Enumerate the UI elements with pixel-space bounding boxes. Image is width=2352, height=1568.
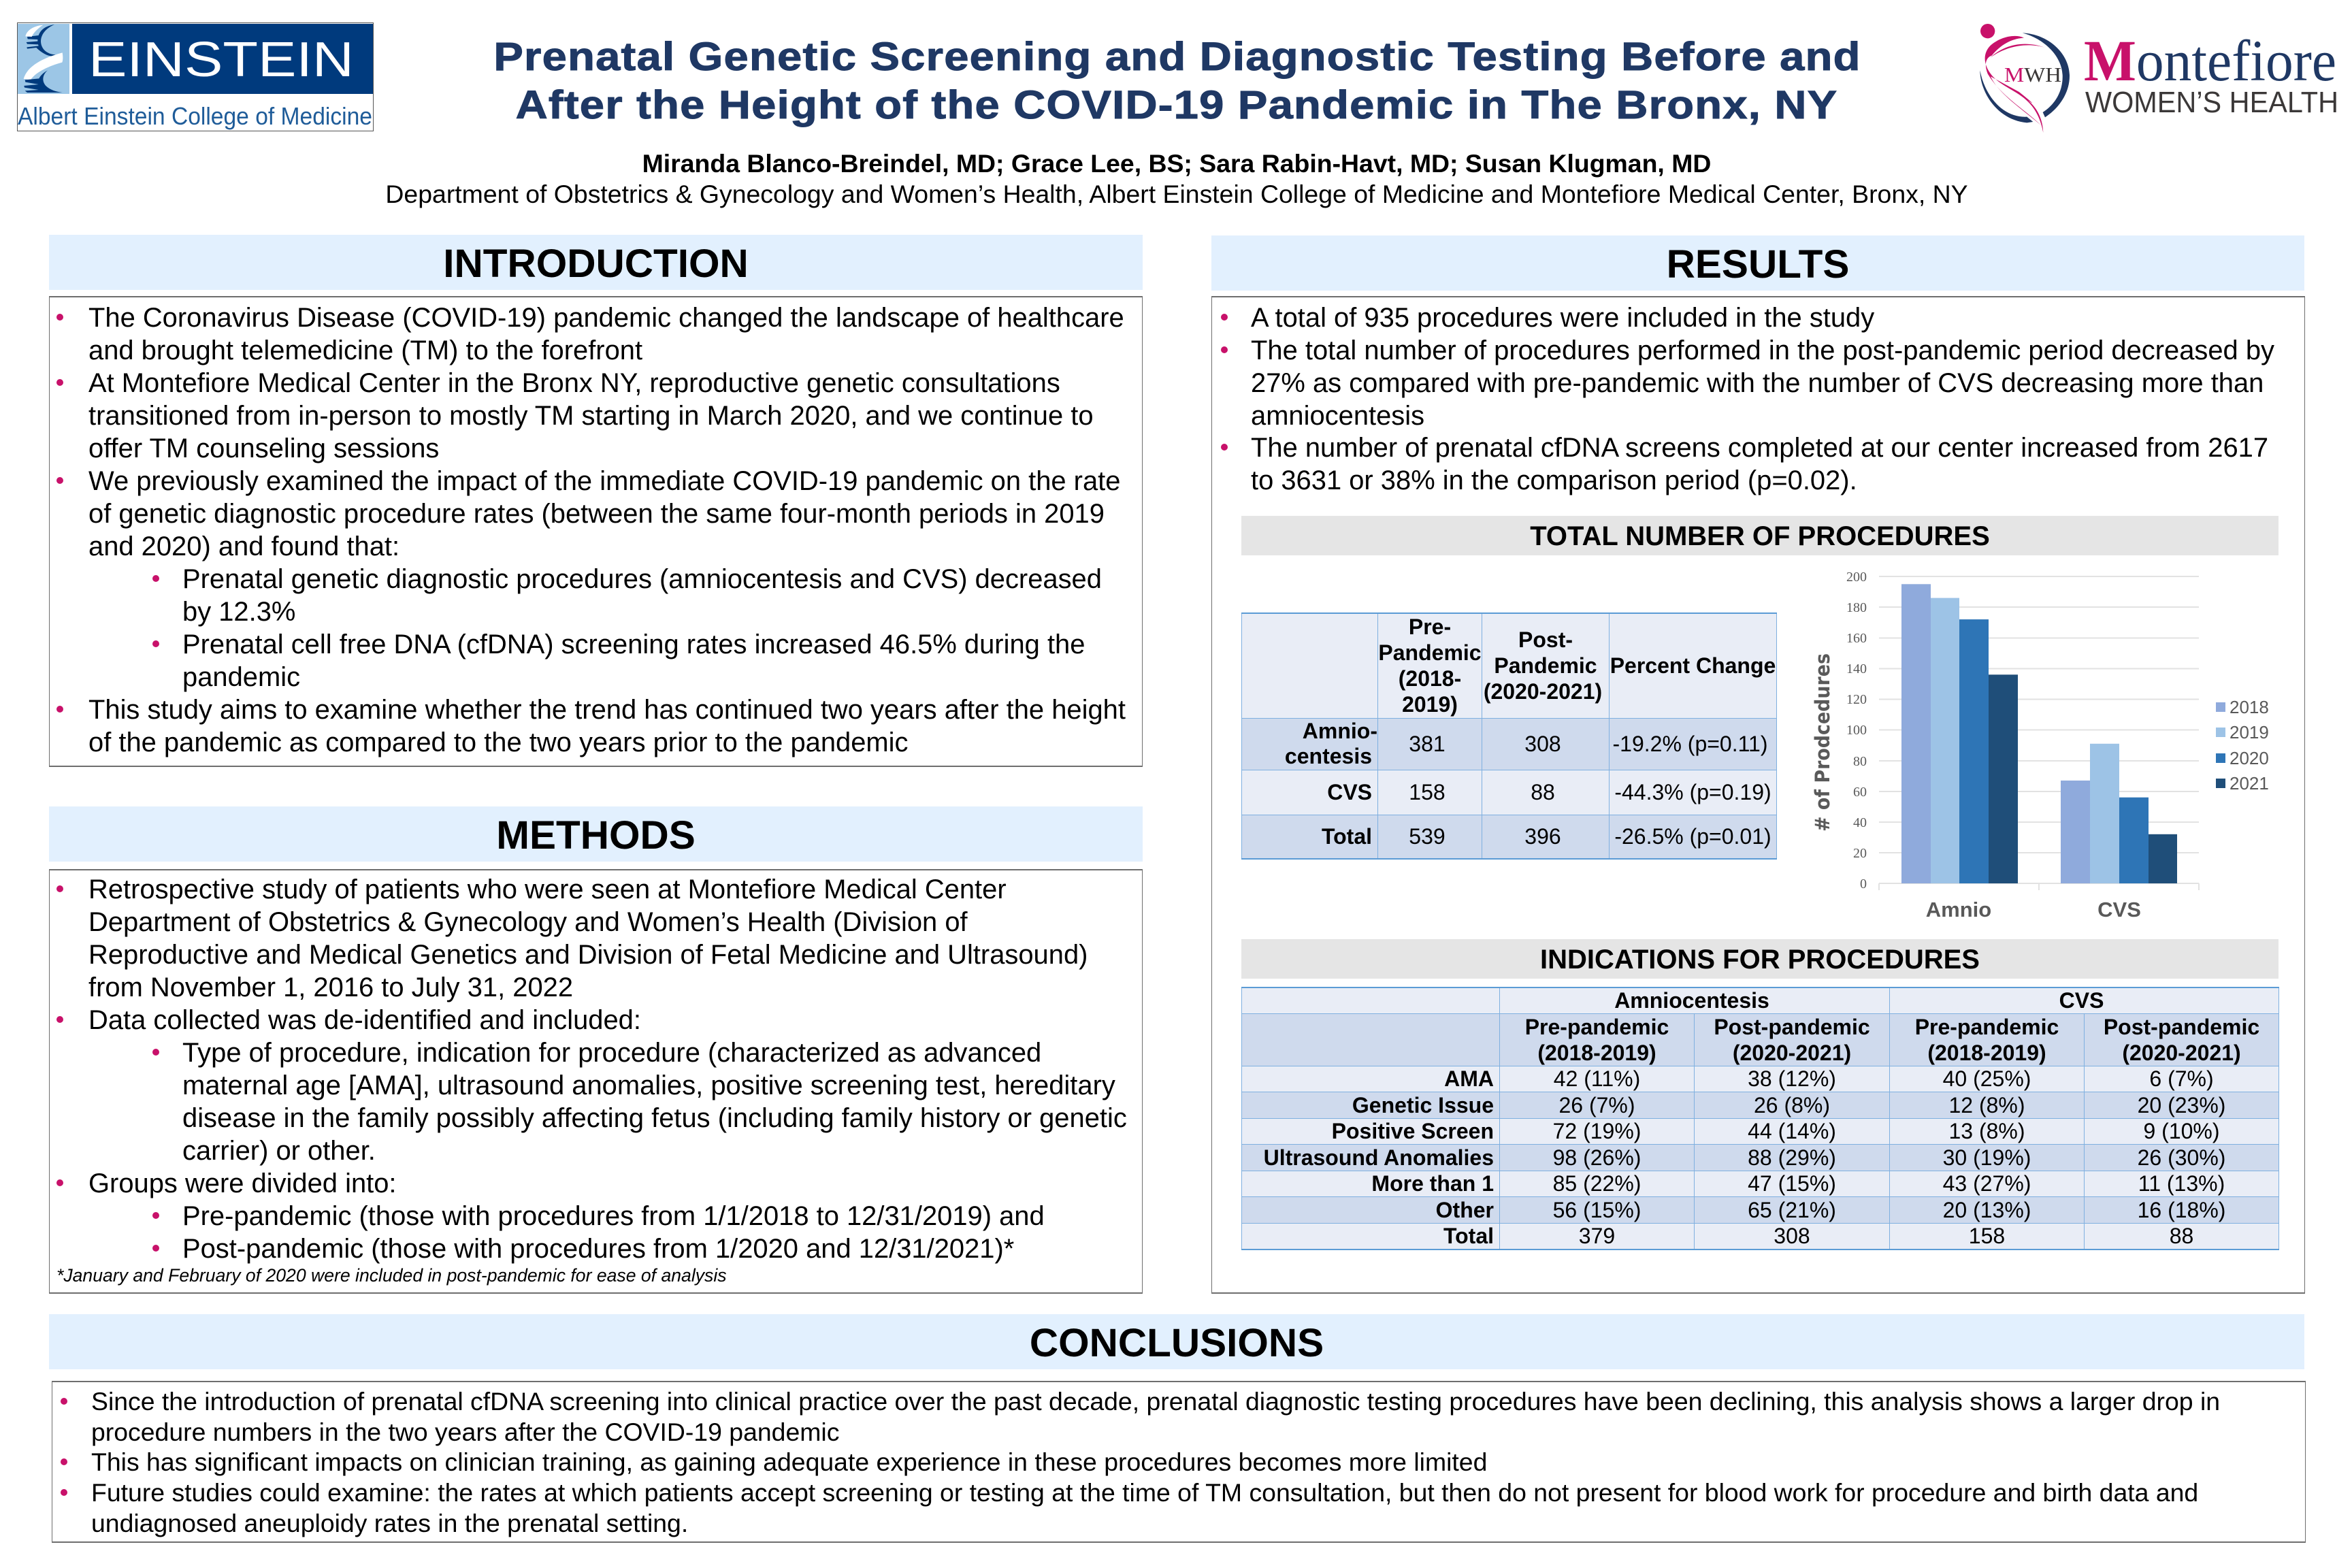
bullet: retrospective study: from November 1, 2016 to July 31, 2022 bbox=[88, 973, 573, 1002]
sub-bullet: procedure type: disease in the family possibly affecting fetus (including family history or genetic bbox=[182, 1103, 1127, 1133]
table: indications bbox=[1241, 987, 2279, 1250]
bullet: telemedicine context: The Coronavirus Disease (COVID-19) pandemic changed the landscape of healthcare bbox=[88, 303, 1124, 333]
bullet: Montefiore transition: At Montefiore Medical Center in the Bronx NY, reproductive genetic consultations bbox=[88, 368, 1060, 398]
table: total procedures: 2019) bbox=[1402, 692, 1458, 717]
bullet: telemedicine context: and brought telemedicine (TM) to the forefront bbox=[88, 336, 642, 365]
sub-bullet: cfDNA increased bbox=[152, 630, 1085, 692]
table: indications: (2020-2021) bbox=[1733, 1040, 1851, 1064]
y axis tick labels: 80 bbox=[1853, 754, 1867, 769]
table: total procedures: 396 bbox=[1524, 824, 1561, 849]
axis title: # of Prodcedures bbox=[1811, 653, 1834, 832]
bullet: previous study: We previously examined the impact of the immediate COVID-19 pandemic on the rate bbox=[88, 466, 1120, 496]
logo: Albert Einstein College of Medicine bbox=[17, 22, 374, 131]
bars: Amnio bbox=[1901, 584, 2018, 883]
panel: results bbox=[1211, 296, 2305, 1294]
subheading: total number of procedures: TOTAL NUMBER OF PROCEDURES bbox=[1530, 521, 1990, 551]
y axis tick labels: 200 bbox=[1846, 570, 1867, 585]
table: total procedures bbox=[1241, 612, 1777, 860]
category labels bbox=[1926, 898, 2141, 921]
table: total procedures: (2020-2021) bbox=[1484, 679, 1602, 704]
sub-bullet: procedures decreased: by 12.3% bbox=[182, 597, 295, 627]
subheading: indications for procedures bbox=[1241, 939, 2278, 979]
bullet: total procedures: A total of 935 procedures were included in the study bbox=[1251, 303, 1874, 333]
subheading: total number of procedures bbox=[1241, 516, 2278, 555]
title: Prenatal Genetic Screening and Diagnostic Testing Before and bbox=[493, 35, 1861, 79]
table: total procedures: Pandemic bbox=[1378, 640, 1482, 665]
sub-bullet: procedures decreased bbox=[152, 564, 1102, 627]
table: indications: 42 (11%) bbox=[1554, 1066, 1640, 1091]
bullet: study aim bbox=[56, 695, 1126, 757]
wordmark: Montefiore: Montefiore bbox=[2084, 28, 2336, 93]
y axis tick labels: 60 bbox=[1853, 785, 1867, 800]
title bbox=[493, 35, 1861, 127]
bullet: telemedicine context bbox=[56, 303, 1124, 365]
panel: introduction bbox=[49, 296, 1143, 767]
panel: methods bbox=[49, 869, 1143, 1294]
sub-bullet: procedure type: Type of procedure, indication for procedure (characterized as advanced bbox=[182, 1038, 1041, 1068]
y axis tick labels: 100 bbox=[1846, 723, 1867, 738]
y axis tick labels: 0 bbox=[1860, 877, 1867, 892]
bullet: declining procedures: procedure numbers in the two years after the COVID-19 pandemic bbox=[91, 1418, 839, 1446]
table: indications: 72 (19%) bbox=[1553, 1119, 1641, 1143]
table: total procedures: (2018- bbox=[1399, 666, 1461, 691]
table: total procedures: Amnio- bbox=[1303, 719, 1377, 743]
table: total procedures: 88 bbox=[1531, 780, 1555, 804]
sub-bullet: procedures decreased: Prenatal genetic diagnostic procedures (amniocentesis and CVS) decreased bbox=[182, 564, 1102, 594]
table: indications: Pre-pandemic bbox=[1525, 1014, 1669, 1039]
bullet: groups: Groups were divided into: bbox=[88, 1169, 397, 1198]
heading: methods bbox=[49, 806, 1143, 862]
table: total procedures: -26.5% (p=0.01) bbox=[1614, 824, 1771, 849]
table: indications: 43 (27%) bbox=[1943, 1171, 2031, 1196]
bullet: retrospective study bbox=[56, 875, 1088, 1002]
bullet: Montefiore transition: offer TM counseling sessions bbox=[88, 434, 439, 463]
table: indications: 12 (8%) bbox=[1948, 1093, 2025, 1117]
title: After the Height of the COVID-19 Pandemic in The Bronx, NY bbox=[516, 83, 1838, 127]
category labels: CVS bbox=[2097, 898, 2141, 921]
bullet: cfDNA screens bbox=[1221, 433, 2268, 495]
heading: introduction: INTRODUCTION bbox=[443, 242, 749, 286]
bullet: retrospective study: Department of Obstetrics & Gynecology and Women’s Health (Division of bbox=[88, 907, 968, 937]
bullet: clinician training: This has significant impacts on clinician training, as gaining adequate experience in these procedures becomes more limited bbox=[91, 1448, 1487, 1476]
logo: Montefiore Women's Health bbox=[1980, 24, 2338, 133]
table: indications: Pre-pandemic bbox=[1915, 1014, 2059, 1039]
table: indications: Amniocentesis bbox=[1614, 988, 1769, 1013]
bullet: decrease in procedures: 27% as compared with pre-pandemic with the number of CVS decreasing more than bbox=[1251, 368, 2264, 398]
table: indications: 16 (18%) bbox=[2138, 1198, 2225, 1222]
table: indications: 98 (26%) bbox=[1553, 1145, 1641, 1170]
table: total procedures: Percent Change bbox=[1610, 653, 1776, 678]
bullet: decrease in procedures: The total number of procedures performed in the post-pandemic period decreased by bbox=[1251, 336, 2274, 365]
sub-bullet: procedure type: carrier) or other. bbox=[182, 1136, 376, 1166]
table: total procedures: CVS bbox=[1327, 780, 1372, 804]
table: indications: Genetic Issue bbox=[1352, 1093, 1494, 1117]
y axis tick labels bbox=[1846, 570, 1867, 892]
bullet: cfDNA screens: The number of prenatal cfDNA screens completed at our center increased from 2617 bbox=[1251, 433, 2268, 463]
bullet: future studies bbox=[61, 1478, 2198, 1537]
table: indications: 26 (8%) bbox=[1754, 1093, 1830, 1117]
bullet: declining procedures: Since the introduction of prenatal cfDNA screening into clinical practice over the past decade, prenatal diagnostic testing procedures have been declining, this analysis shows a larger drop in bbox=[91, 1387, 2220, 1416]
table: indications: 88 (29%) bbox=[1748, 1145, 1836, 1170]
table: indications: 158 bbox=[1969, 1224, 2005, 1248]
table: total procedures: centesis bbox=[1285, 744, 1372, 768]
heading: conclusions bbox=[49, 1314, 2304, 1369]
heading: conclusions: CONCLUSIONS bbox=[1030, 1321, 1324, 1365]
table: indications: 38 (12%) bbox=[1748, 1066, 1836, 1091]
table: indications: Positive Screen bbox=[1332, 1119, 1494, 1143]
table: indications: 379 bbox=[1579, 1224, 1615, 1248]
table: total procedures: Pre- bbox=[1409, 615, 1451, 639]
bullet: future studies: undiagnosed aneuploidy rates in the prenatal setting. bbox=[91, 1509, 688, 1537]
table: indications: 9 (10%) bbox=[2143, 1119, 2220, 1143]
sub-bullet: procedure type: maternal age [AMA], ultrasound anomalies, positive screening test, hereditary bbox=[182, 1071, 1115, 1100]
table: total procedures: 539 bbox=[1409, 824, 1446, 849]
table: indications: CVS bbox=[2059, 988, 2104, 1013]
y axis tick labels: 120 bbox=[1846, 692, 1867, 707]
y axis tick labels: 160 bbox=[1846, 631, 1867, 646]
bullet: cfDNA screens: to 3631 or 38% in the comparison period (p=0.02). bbox=[1251, 466, 1857, 495]
table: indications: 47 (15%) bbox=[1748, 1171, 1836, 1196]
table: indications: 40 (25%) bbox=[1943, 1066, 2031, 1091]
table: indications: Other bbox=[1436, 1198, 1494, 1222]
heading: results: RESULTS bbox=[1667, 242, 1849, 287]
table: total procedures: Pandemic bbox=[1494, 653, 1597, 678]
table: indications: 13 (8%) bbox=[1948, 1119, 2025, 1143]
y axis tick labels: 140 bbox=[1846, 662, 1867, 676]
table: indications: AMA bbox=[1444, 1066, 1494, 1091]
bullet: retrospective study: Reproductive and Medical Genetics and Division of Fetal Medicine and Ultrasound) bbox=[88, 940, 1088, 970]
heading: introduction bbox=[49, 235, 1143, 290]
table: indications: 88 bbox=[2170, 1224, 2193, 1248]
table: indications: 26 (30%) bbox=[2138, 1145, 2225, 1170]
legend: 2020 bbox=[2230, 748, 2269, 768]
table: indications: 30 (19%) bbox=[1943, 1145, 2031, 1170]
legend: 2019 bbox=[2230, 722, 2269, 742]
table: indications: 65 (21%) bbox=[1748, 1198, 1836, 1222]
table: indications: 308 bbox=[1774, 1224, 1810, 1248]
sub-bullet: pre-pandemic: Pre-pandemic (those with procedures from 1/1/2018 to 12/31/2019) and bbox=[182, 1201, 1045, 1231]
bullet: future studies: Future studies could examine: the rates at which patients accept screening or testing at the time of TM consultation, but then do not present for blood work for procedure and birth data and bbox=[91, 1478, 2198, 1507]
bullet: decrease in procedures: amniocentesis bbox=[1251, 401, 1424, 431]
table: indications: Total bbox=[1443, 1224, 1494, 1248]
bullet: Montefiore transition bbox=[56, 368, 1094, 463]
subheading: indications for procedures: INDICATIONS FOR PROCEDURES bbox=[1540, 945, 1980, 975]
table: indications: 6 (7%) bbox=[2149, 1066, 2214, 1091]
y axis tick labels: 20 bbox=[1853, 846, 1867, 861]
bars: CVS bbox=[2061, 744, 2177, 883]
heading: results bbox=[1211, 235, 2304, 291]
bullet: declining procedures bbox=[61, 1387, 2220, 1446]
table: total procedures: 381 bbox=[1409, 732, 1446, 756]
table: total procedures: 308 bbox=[1524, 732, 1561, 756]
bullet: study aim: This study aims to examine whether the trend has continued two years after the height bbox=[88, 695, 1126, 725]
bullet: previous study bbox=[56, 466, 1120, 561]
wordmark: EINSTEIN: EINSTEIN bbox=[88, 33, 354, 87]
sub-bullet: cfDNA increased: Prenatal cell free DNA (cfDNA) screening rates increased 46.5% during the bbox=[182, 630, 1085, 659]
affiliation: Department of Obstetrics & Gynecology and Women’s Health, Albert Einstein College of Medicine and Montefiore Medical Center, Bronx, NY bbox=[385, 180, 1968, 208]
sub-bullet: post-pandemic: Post-pandemic (those with procedures from 1/2020 and 12/31/2021)* bbox=[182, 1234, 1014, 1264]
table: indications: 85 (22%) bbox=[1553, 1171, 1641, 1196]
bullet: decrease in procedures bbox=[1221, 336, 2274, 431]
footnote: *January and February of 2020 were included in post-pandemic for ease of analysis bbox=[56, 1265, 727, 1286]
category labels: Amnio bbox=[1926, 898, 1991, 921]
table: indications: (2018-2019) bbox=[1927, 1040, 2046, 1064]
table: indications: More than 1 bbox=[1371, 1171, 1494, 1196]
table: total procedures: Total bbox=[1322, 824, 1372, 849]
bullet: retrospective study: Retrospective study of patients who were seen at Montefiore Medical Center bbox=[88, 875, 1007, 904]
table: indications: 56 (15%) bbox=[1553, 1198, 1641, 1222]
legend: 2018 bbox=[2230, 697, 2269, 717]
table: indications: Post-pandemic bbox=[1714, 1014, 1870, 1039]
chart: procedures per year bbox=[1811, 570, 2269, 921]
table: indications: 11 (13%) bbox=[2138, 1171, 2225, 1196]
sub-bullet: procedure type bbox=[152, 1038, 1127, 1166]
panel: conclusions bbox=[52, 1381, 2306, 1543]
bullet: previous study: and 2020) and found that: bbox=[88, 532, 399, 561]
authors: Miranda Blanco-Breindel, MD; Grace Lee, BS; Sara Rabin-Havt, MD; Susan Klugman, MD bbox=[642, 149, 1711, 178]
bullet: study aim: of the pandemic as compared to the two years prior to the pandemic bbox=[88, 728, 908, 757]
table: total procedures: -44.3% (p=0.19) bbox=[1614, 780, 1771, 804]
table: indications: (2020-2021) bbox=[2122, 1040, 2241, 1064]
y axis tick labels: 40 bbox=[1853, 815, 1867, 830]
table: indications: (2018-2019) bbox=[1537, 1040, 1656, 1064]
table: indications: 26 (7%) bbox=[1558, 1093, 1635, 1117]
y axis tick labels: 180 bbox=[1846, 600, 1867, 615]
legend bbox=[2216, 697, 2269, 794]
bullet: previous study: of genetic diagnostic procedure rates (between the same four-month periods in 2019 bbox=[88, 499, 1105, 529]
table: indications: 20 (13%) bbox=[1943, 1198, 2031, 1222]
logo monogram: MWH: MWH bbox=[2004, 63, 2061, 86]
bullet: data collected: Data collected was de-identified and included: bbox=[88, 1005, 641, 1035]
table: indications: 20 (23%) bbox=[2138, 1093, 2225, 1117]
legend: 2021 bbox=[2230, 773, 2269, 794]
table: indications: Ultrasound Anomalies bbox=[1264, 1145, 1494, 1170]
table: indications: 44 (14%) bbox=[1748, 1119, 1836, 1143]
table: total procedures: -19.2% (p=0.11) bbox=[1613, 732, 1767, 756]
sub-bullet: cfDNA increased: pandemic bbox=[182, 662, 300, 692]
bullet: Montefiore transition: transitioned from in-person to mostly TM starting in March 2020, and we continue to bbox=[88, 401, 1094, 431]
table: total procedures: Post- bbox=[1518, 627, 1573, 652]
table: total procedures: 158 bbox=[1409, 780, 1446, 804]
heading: methods: METHODS bbox=[496, 813, 696, 858]
table: indications: Post-pandemic bbox=[2104, 1014, 2259, 1039]
